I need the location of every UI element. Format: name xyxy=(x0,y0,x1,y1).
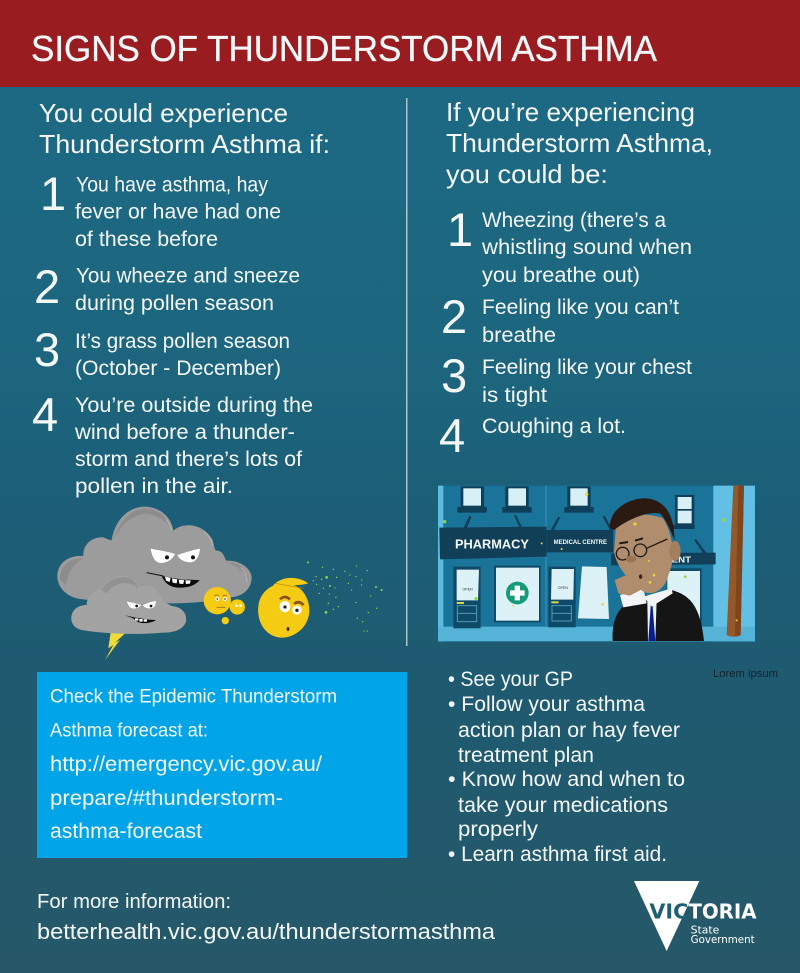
illustration: storm clouds and pollen xyxy=(57,507,383,660)
forecast callout: Check the Epidemic Thunderstorm xyxy=(50,686,337,708)
icon: lightning bolt xyxy=(105,633,126,660)
logo: Victoria State Government xyxy=(634,881,757,951)
right heading: If you’re experiencing xyxy=(446,97,695,127)
symptom 4 xyxy=(439,409,626,462)
street scene: OPEN xyxy=(558,586,568,590)
item 2: You wheeze and sneeze xyxy=(76,264,300,288)
right heading: Thunderstorm Asthma, xyxy=(446,128,713,158)
left numbered list xyxy=(32,167,313,498)
item 2: during pollen season xyxy=(75,292,274,315)
symptom 3: is tight xyxy=(482,384,547,407)
item 1: of these before xyxy=(75,228,218,251)
pollen specks xyxy=(443,493,738,621)
right heading: you could be: xyxy=(446,159,608,189)
item 3: It’s grass pollen season xyxy=(75,330,290,353)
symptom 1: Wheezing (there’s a xyxy=(482,209,666,232)
symptom 4: 4 xyxy=(439,409,465,462)
caption: Lorem ipsum xyxy=(713,668,778,680)
symptom 2: Feeling like you can’t xyxy=(482,296,679,319)
title banner: SIGNS OF THUNDERSTORM ASTHMA xyxy=(31,28,657,69)
logo: Victoria State Government: VIC xyxy=(649,899,688,923)
footer: more information: betterhealth.vic.gov.au/thunderstormasthma xyxy=(37,919,496,944)
shop signs xyxy=(439,527,547,559)
item 1: fever or have had one xyxy=(75,200,281,224)
item 4: wind before a thunder- xyxy=(74,421,295,444)
footer: more information xyxy=(37,891,496,944)
logo: Victoria State Government: TORIA xyxy=(688,899,757,923)
item 3: 3 xyxy=(34,323,60,376)
action list: action plan or hay fever xyxy=(458,719,680,742)
item 4: storm and there’s lots of xyxy=(75,448,302,471)
forecast callout: prepare/#thunderstorm- xyxy=(50,786,283,810)
item 4 xyxy=(32,388,313,498)
action list: take your medications xyxy=(458,794,668,817)
pollen particles xyxy=(307,561,383,632)
action list: • Follow your asthma xyxy=(448,693,645,716)
symptom 3: Feeling like your chest xyxy=(482,356,692,379)
forecast callout xyxy=(37,672,407,858)
left heading: Thunderstorm Asthma if: xyxy=(39,129,330,159)
item 3: (October - December) xyxy=(75,357,281,380)
symptom 1: whistling sound when xyxy=(481,236,692,259)
street scene: PHARMACY xyxy=(455,537,529,552)
upper windows xyxy=(457,486,707,553)
column divider xyxy=(406,98,408,646)
icon: small cloud xyxy=(71,576,186,634)
icon: large cloud xyxy=(57,507,252,603)
right heading xyxy=(446,97,713,189)
street scene: MEDICAL CENTRE xyxy=(554,540,607,546)
logo: Victoria State Government: Government xyxy=(691,933,755,946)
symptom 2: 2 xyxy=(441,290,467,343)
right numbered list xyxy=(439,203,692,462)
icon: small pollen faces xyxy=(204,587,245,624)
icon: large pollen face xyxy=(258,578,309,638)
man coughing xyxy=(610,498,704,641)
power pole xyxy=(727,486,744,637)
item 4: You’re outside during the xyxy=(75,394,313,417)
forecast callout: http://emergency.vic.gov.au/ xyxy=(50,752,322,776)
symptom 1 xyxy=(447,203,692,287)
action list: properly xyxy=(458,818,539,841)
action list xyxy=(448,668,685,866)
action list: • See your GP xyxy=(448,668,573,691)
item 3 xyxy=(34,323,290,380)
item 4: pollen in the air. xyxy=(75,475,233,498)
item 4: 4 xyxy=(32,388,58,441)
item 2 xyxy=(34,260,300,315)
logo: Victoria State Government: State xyxy=(691,923,719,936)
footer: more information: For more information: xyxy=(37,891,231,913)
title banner xyxy=(0,0,800,87)
street scene xyxy=(438,486,755,641)
street scene: ENT xyxy=(672,555,692,565)
item 1: 1 xyxy=(40,167,66,220)
left heading xyxy=(39,98,330,159)
symptom 3: 3 xyxy=(441,349,467,402)
item 1 xyxy=(40,167,281,251)
symptom 1: you breathe out) xyxy=(482,264,640,287)
symptom 2: breathe xyxy=(482,324,556,347)
symptom 3 xyxy=(441,349,692,407)
open signs: OPEN xyxy=(462,587,473,591)
action list: • Know how and when to xyxy=(448,768,685,791)
illustration: man coughing outside pharmacy xyxy=(438,486,755,641)
item 2: 2 xyxy=(34,260,60,313)
symptom 1: 1 xyxy=(447,203,473,256)
forecast callout: Asthma forecast at: xyxy=(50,720,208,742)
shop doors and windows xyxy=(453,566,702,628)
action list: • Learn asthma first aid. xyxy=(448,843,667,866)
item 1: You have asthma, hay xyxy=(76,174,268,196)
action list: treatment plan xyxy=(458,744,594,767)
forecast callout: asthma-forecast xyxy=(50,819,202,843)
symptom 4: Coughing a lot. xyxy=(482,415,626,438)
symptom 2 xyxy=(441,290,679,347)
left heading: You could experience xyxy=(39,98,288,128)
